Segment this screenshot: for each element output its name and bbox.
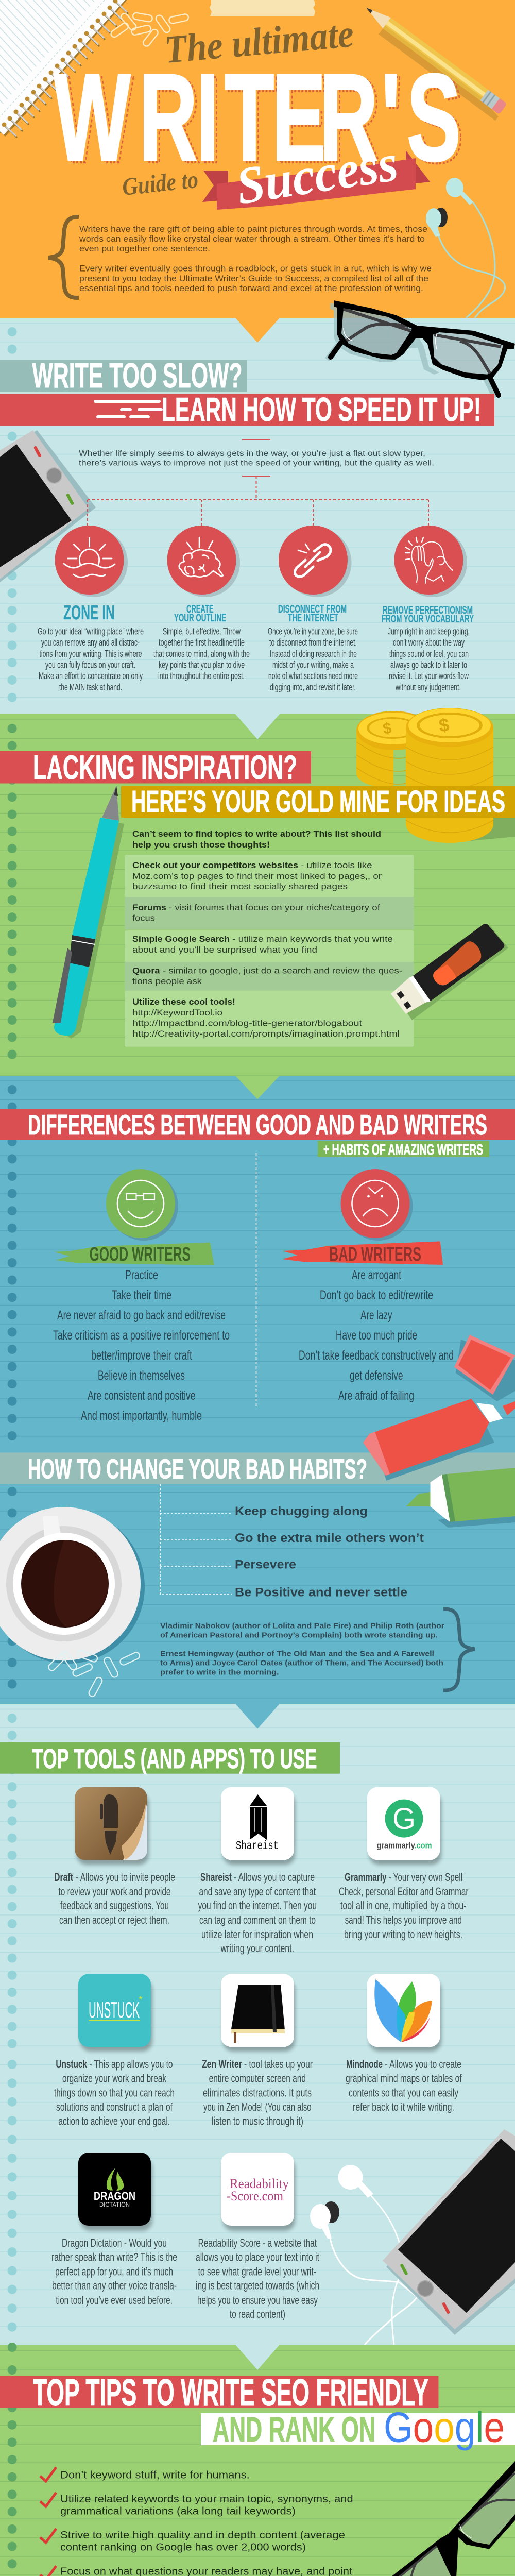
tool: readability score: ing is best targeted towards (which	[196, 2279, 319, 2292]
brush label: good writers	[54, 1243, 214, 1265]
tool: draft: can then accept or reject them.	[59, 1913, 169, 1926]
card: competitors: Moz.com’s top pages to find their most linked to pages,, or	[132, 872, 382, 881]
tip: disconnect from the internet: to disconnect from the internet.	[269, 637, 357, 648]
list: bad writers: Are afraid of failing	[338, 1388, 414, 1403]
panel: lacking inspiration	[0, 708, 515, 1076]
tool: dragon dictation: perfect app for you, and it’s much	[55, 2265, 173, 2278]
tool: shareist: you find on the internet. Then you	[198, 1899, 317, 1912]
habits checklist: Be Positive and never settle	[235, 1586, 407, 1599]
card: competitors: buzzsumo to find their most socially shared pages	[132, 882, 348, 891]
tool: dragon dictation: DICTATION	[99, 2201, 130, 2208]
tip: create your outline: into throughout the entire post.	[158, 670, 245, 681]
tool: unstuck	[54, 1974, 175, 2128]
tool: unstuck: *	[139, 1994, 143, 2006]
tip: disconnect from the internet	[268, 526, 358, 692]
card: quora: tions people ask	[132, 977, 202, 986]
card: quora: - similar to google, just do a search and review the ques-	[163, 967, 402, 976]
tip: create your outline: YOUR OUTLINE	[174, 612, 226, 624]
intro: find topics	[132, 829, 381, 850]
column: good writers	[53, 1169, 230, 1423]
quotes: famous writers	[160, 1622, 444, 1677]
tip: zone in: ZONE IN	[63, 602, 115, 624]
tool: draft: - Allows you to invite people	[76, 1871, 175, 1884]
tool: grammarly: bring your writing to new heights.	[344, 1928, 462, 1941]
tip: remove perfectionism: revise it. Let your words flow	[389, 670, 469, 681]
card: competitors	[125, 855, 414, 897]
tool: readability score: Readability	[230, 2176, 289, 2191]
heading: learn how to speed it up	[0, 391, 494, 428]
tool: zen writer: listen to music through it)	[212, 2115, 303, 2128]
intro text: words can easily flow like crystal clear water through a stream. Other times it’s hard to	[79, 234, 425, 244]
tip: zone in: tions from your writing. This is where	[39, 648, 142, 659]
tool: readability score: allows you to place your text into it	[196, 2251, 319, 2264]
tip: create your outline: CREATE	[186, 603, 213, 615]
icon: brain	[179, 537, 223, 577]
usb drive	[391, 924, 508, 1020]
tip: remove perfectionism: Jump right in and keep going,	[388, 626, 470, 637]
list: good writers: better/improve their craft	[91, 1348, 192, 1363]
brace: intro	[48, 217, 79, 298]
tip: zone in: you can fully focus on your craft.	[45, 659, 135, 670]
tip: disconnect from the internet: DISCONNECT FROM	[278, 603, 347, 615]
tool: zen writer: entire computer screen and	[209, 2072, 306, 2085]
tip: disconnect from the internet: THE INTERNET	[288, 612, 338, 624]
icon: happy face	[106, 1169, 178, 1241]
tool: shareist: - Allows you to capture	[234, 1871, 315, 1884]
tool: mindnode	[346, 1974, 462, 2113]
quotes: famous writers: of American Pastoral and Portnoy’s Complain) both wrote standing up.	[160, 1631, 438, 1639]
tool: draft: to review your work and provide	[59, 1885, 171, 1898]
gold coins	[356, 708, 515, 843]
tip 2: grammatical variations (aka long tail keywords)	[60, 2505, 296, 2517]
tip: zone in	[38, 526, 144, 692]
heading: write too slow: WRITE TOO SLOW?	[32, 356, 242, 395]
tool: zen writer: you in Zen Mode! (You can also	[203, 2100, 312, 2113]
heading: top tools: TOP TOOLS (AND APPS) TO USE	[32, 1743, 317, 1774]
panel: tools	[0, 1704, 515, 2345]
tool: dragon dictation: DRAGON	[94, 2190, 135, 2202]
habits checklist: Go the extra mile others won’t	[235, 1531, 424, 1545]
tip: zone in: Go to your ideal “writing place” where	[38, 626, 144, 637]
ribbon: success: Success	[232, 133, 402, 216]
earphones: white	[310, 2165, 417, 2345]
brush label: bad writers: BAD WRITERS	[329, 1244, 421, 1265]
list: bad writers: Are arrogant	[352, 1268, 401, 1282]
card: cool tools: http://Impactbnd.com/blog-title-generator/blogabout	[132, 1019, 362, 1028]
intro rules and text	[79, 440, 434, 476]
tool: dragon dictation: better than any other voice transla-	[52, 2279, 177, 2292]
gold coins: $	[437, 714, 451, 736]
icon: sun and waves	[64, 538, 115, 577]
brush label: good writers: GOOD WRITERS	[90, 1244, 191, 1265]
tip: zone in: Make an effort to concentrate on only	[39, 670, 143, 681]
tip: zone in: you can remove any and all distrac-	[41, 637, 140, 648]
heading: rank on google: Google	[384, 2403, 505, 2451]
brace: quotes	[443, 1609, 475, 1690]
card: forums: Forums	[132, 903, 166, 912]
tip: remove perfectionism: things sound or feel, you can	[389, 648, 469, 659]
habits checklist	[160, 1484, 424, 1599]
intro text	[79, 224, 432, 293]
tip: remove perfectionism: don’t worry about the way	[393, 637, 465, 648]
tip: disconnect from the internet: Instead of doing research in the	[270, 648, 357, 659]
tool: readability score: to see what grade level your writ-	[198, 2265, 316, 2278]
tape	[210, 0, 315, 16]
card: cool tools: http://Creativity-portal.com/prompts/imagination.prompt.html	[132, 1029, 400, 1039]
tool: draft: feedback and suggestions. You	[60, 1899, 169, 1912]
tool: unstuck: things down so that you can reach	[54, 2086, 175, 2099]
tip 3: content ranking on Google has over 2,000 words)	[60, 2541, 306, 2553]
habits checklist: Persevere	[235, 1558, 296, 1572]
list: bad writers: Don’t go back to edit/rewrite	[320, 1288, 433, 1302]
heading: lacking inspiration: LACKING INSPIRATION?	[33, 748, 297, 786]
quotes: famous writers: prefer to write in the morning.	[160, 1668, 279, 1677]
card: competitors: Check out your competitors websites	[132, 861, 298, 870]
coffee cup	[0, 1507, 145, 1664]
divider	[255, 1153, 256, 1408]
heading: rank on google: AND RANK ON	[213, 2410, 375, 2449]
tool: zen writer: Zen Writer	[202, 2058, 242, 2071]
heading: rank on google	[201, 2403, 515, 2451]
tool: unstuck: - This app allows you to	[90, 2058, 173, 2071]
list: good writers: Believe in themselves	[98, 1368, 185, 1383]
gold coins: $	[382, 720, 393, 738]
tool: dragon dictation: rather speak than write? This is the	[52, 2251, 177, 2264]
paper clips	[47, 1650, 141, 1698]
tip: disconnect from the internet: digging into, and revisit it later.	[270, 682, 356, 692]
connector: dashed tree	[88, 477, 428, 526]
tip 2	[40, 2493, 353, 2517]
tool: shareist: and save any type of content that	[199, 1885, 316, 1898]
panel: write too slow	[0, 300, 515, 715]
habits checklist: Keep chugging along	[235, 1504, 368, 1518]
tool: dragon dictation	[52, 2153, 177, 2307]
phone: tablet	[383, 2129, 515, 2335]
brush label: bad writers	[282, 1241, 443, 1265]
pencil	[358, 3, 508, 121]
tool: shareist: Shareist	[236, 1839, 279, 1853]
tip: create your outline	[153, 526, 250, 681]
heading: top tools	[0, 1742, 340, 1774]
heading: write too slow	[0, 356, 247, 395]
column: bad writers	[282, 1169, 454, 1403]
intro: find topics: help you crush those thoughts!	[132, 840, 270, 850]
intro: find topics: Can’t seem to find topics to write about? This list should	[132, 829, 381, 839]
tool: readability score: to read content)	[230, 2308, 285, 2320]
tool: mindnode: graphical mind maps or tables of	[346, 2072, 462, 2085]
tip 3	[40, 2529, 345, 2553]
tool: readability score: helps you to ensure you have easy	[197, 2294, 318, 2307]
tool: shareist: can tag and comment on them to	[199, 1913, 316, 1926]
intro text: Writers have the rare gift of being able to paint pictures through words. At times, those	[79, 224, 427, 234]
tool: mindnode: Mindnode	[346, 2058, 383, 2071]
card: cool tools: Utilize these cool tools!	[132, 997, 235, 1007]
tool: unstuck: UNSTUCK	[89, 1997, 140, 2023]
tool: shareist: writing your content.	[220, 1942, 294, 1955]
tool: zen writer: eliminates distractions. It puts	[203, 2086, 312, 2099]
tip: remove perfectionism: always go back to it later to	[390, 659, 467, 670]
phone	[0, 430, 96, 582]
tip: create your outline: Simple, but effective. Throw	[163, 626, 241, 637]
tool: grammarly: - Your very own Spell	[388, 1871, 462, 1884]
tool: draft	[54, 1787, 175, 1926]
card: quora	[125, 962, 414, 991]
tool: shareist: utilize later for inspiration when	[201, 1928, 313, 1941]
list: bad writers: Are lazy	[360, 1308, 392, 1323]
intro text: Every writer eventually goes through a roadblock, or gets stuck in a rut, which is why we	[79, 264, 432, 273]
tool: unstuck: Unstuck	[56, 2058, 88, 2071]
tool: zen writer: - tool takes up your	[244, 2058, 313, 2071]
card: competitors: - utilize tools like	[301, 861, 372, 870]
tips checklist	[40, 2467, 354, 2576]
tip: disconnect from the internet: note of what sections need more	[268, 670, 358, 681]
tip 3: Strive to write high quality and in depth content (average	[60, 2529, 345, 2541]
notebook with spiral binding	[0, 0, 128, 138]
quotes: famous writers: Vladimir Nabokov (author of Lolita and Pale Fire) and Philip Roth (author	[160, 1622, 444, 1631]
tip: remove perfectionism: without any judgement.	[395, 682, 461, 692]
glasses	[327, 300, 515, 398]
tool: grammarly: sand! This helps you improve and	[345, 1913, 462, 1926]
tool: mindnode: - Allows you to create	[385, 2058, 461, 2071]
paper clips	[110, 12, 189, 47]
pen	[53, 786, 124, 1039]
tool: grammarly: tool all in one, multiplied by a thou-	[340, 1899, 467, 1912]
list: bad writers: Don’t take feedback constructively and	[299, 1348, 454, 1363]
list: good writers: Take criticism as a positive reinforcement to	[53, 1328, 230, 1343]
tool: shareist	[198, 1787, 317, 1955]
tool: unstuck: organize your work and break	[62, 2072, 167, 2085]
intro text: present to you today the Ultimate Writer’s Guide to Success, a compiled list of all of the	[79, 274, 428, 283]
card: google search: Simple Google Search	[132, 935, 230, 944]
tip: create your outline: key points that you plan to dive	[159, 659, 245, 670]
card: forums	[125, 897, 414, 929]
quotes: famous writers: to Arms) and Joyce Carol Oates (author of Them, and The Accursed) both	[160, 1658, 443, 1667]
marker: green	[406, 1468, 515, 1528]
tool: grammarly	[339, 1787, 468, 1941]
panel: header	[0, 0, 515, 318]
tip 2: Utilize related keywords to your main topic, synonyms, and	[60, 2493, 353, 2505]
icon: angry face	[341, 1169, 413, 1241]
icon: broken link	[295, 544, 331, 577]
tool: dragon dictation: Dragon Dictation - Would you	[62, 2236, 167, 2249]
tip: disconnect from the internet: Once you’re in your zone, be sure	[268, 626, 358, 637]
tool: draft: Draft	[54, 1871, 73, 1884]
card: cool tools: http://KeywordTool.io	[132, 1008, 222, 1018]
card: google search	[125, 930, 414, 962]
intro text: essential tips and tools needed to push forward and excel at the profession of writing.	[79, 283, 423, 293]
tool: unstuck: action to achieve your end goal.	[59, 2115, 170, 2128]
tool: readability score	[196, 2153, 319, 2320]
tip: remove perfectionism	[382, 526, 474, 692]
tool: unstuck: solutions and construct a plan of	[56, 2100, 173, 2113]
card: forums: focus	[132, 914, 155, 923]
tool: grammarly: G	[392, 1802, 416, 1836]
intro rules and text: Whether life simply seems to always gets in the way, or you’re just a flat out slow typer,	[79, 449, 425, 458]
heading: lacking inspiration	[0, 748, 311, 786]
tip: disconnect from the internet: midst of your writing, make a	[272, 659, 354, 670]
earphones	[426, 176, 505, 318]
card: quora: Quora	[132, 967, 160, 976]
title: writers dashed outline: WRITER'S	[57, 50, 464, 189]
tool: grammarly: Grammarly	[345, 1871, 387, 1884]
tool: readability score: Readability Score - a website that	[198, 2236, 317, 2249]
title: writers: WRITER'S	[54, 48, 461, 187]
icon: facepalm	[405, 537, 453, 583]
tip: create your outline: together the first headline/title	[159, 637, 245, 648]
list: good writers: Are consistent and positive	[88, 1388, 196, 1403]
tip 1: Don’t keyword stuff, write for humans.	[60, 2469, 250, 2481]
card: google search: about and you’ll be surprised what you find	[132, 945, 317, 955]
tip: zone in: the MAIN task at hand.	[59, 682, 122, 692]
intro text: even put together one sentence.	[79, 244, 210, 253]
list: good writers: Are never afraid to go back and edit/revise	[57, 1308, 226, 1323]
list: good writers	[53, 1268, 230, 1423]
list: good writers: Practice	[125, 1268, 158, 1282]
list: good writers: And most importantly, humble	[81, 1409, 202, 1423]
card: google search: - utilize main keywords that you write	[232, 935, 393, 944]
intro rules and text: there’s various ways to improve not just the speed of your writing, but the quality as well.	[79, 459, 434, 468]
card: forums: - visit forums that focus on your niche/category of	[169, 903, 380, 912]
tip: create your outline: that comes to mind, along with the	[153, 648, 250, 659]
tool: dragon dictation: tion tool you’ve ever used before.	[56, 2294, 173, 2307]
panel: seo tips	[0, 2343, 515, 2576]
tool: zen writer	[202, 1974, 313, 2128]
panel: good and bad writers	[0, 1076, 515, 1704]
list: bad writers	[299, 1268, 454, 1403]
glasses: green	[362, 2461, 515, 2576]
tool: grammarly: grammarly.com	[377, 1841, 432, 1851]
icon: speed lines	[95, 401, 161, 417]
title: the ultimate: The ultimate	[163, 12, 355, 72]
marker: red	[363, 1335, 515, 1481]
quotes: famous writers: Ernest Hemingway (author of The Old Man and the Sea and A Farewell	[160, 1650, 434, 1658]
tool: shareist: Shareist	[200, 1871, 232, 1884]
list: good writers: Take their time	[112, 1288, 171, 1302]
tool: readability score: -Score.com	[227, 2189, 283, 2204]
list: bad writers: get defensive	[350, 1368, 403, 1383]
tool: mindnode: refer back to it while writing.	[353, 2100, 454, 2113]
list: bad writers: Have too much pride	[336, 1328, 417, 1343]
title: guide to: Guide to	[121, 166, 199, 201]
card: cool tools	[125, 991, 414, 1047]
tool: mindnode: contents so that you can easily	[349, 2086, 458, 2099]
